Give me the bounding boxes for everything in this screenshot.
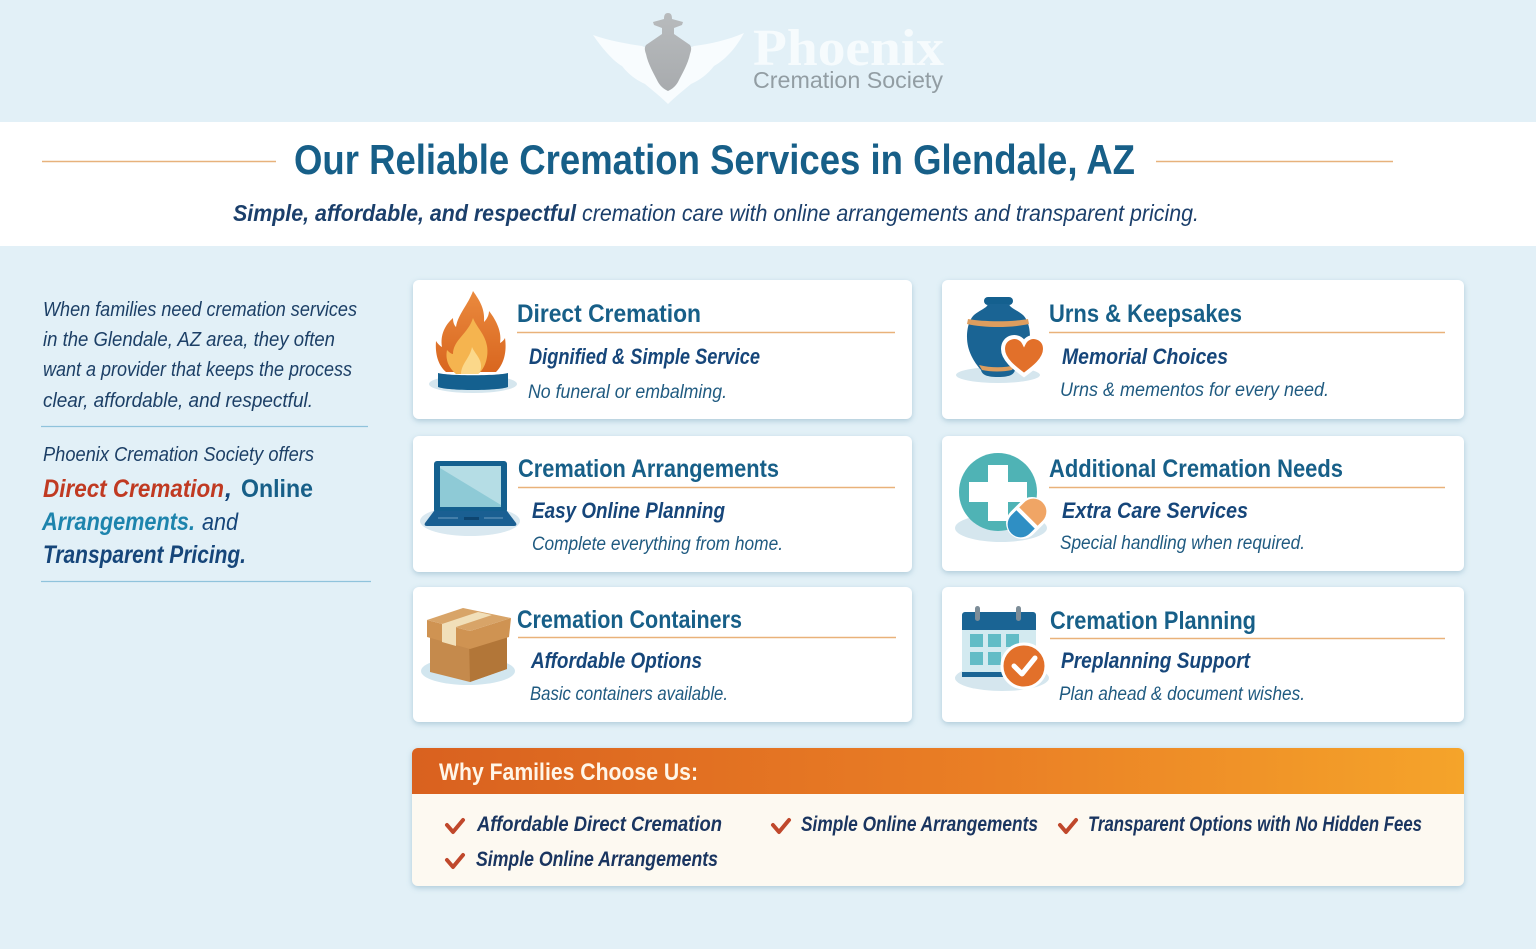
checklist item: Affordable Direct Cremation: [476, 813, 722, 836]
logo: [593, 13, 944, 104]
panel: cremation arrangements: [413, 436, 912, 572]
card heading: Urns & Keepsakes: [1049, 300, 1242, 328]
card subheading: Memorial Choices: [1062, 344, 1228, 369]
icon: winged urn: [593, 13, 744, 104]
panel: intro text: Online: [241, 475, 313, 503]
card description: Plan ahead & document wishes.: [1059, 684, 1305, 705]
title: Our Reliable Cremation Services in Glendale, AZ: [294, 136, 1135, 183]
icon: laptop: [420, 461, 520, 536]
panel: additional cremation needs: [942, 436, 1464, 571]
card heading: Additional Cremation Needs: [1049, 455, 1343, 483]
card heading: Cremation Arrangements: [518, 455, 779, 483]
panel: intro text: When families need cremation services: [43, 298, 357, 321]
card description: Special handling when required.: [1060, 533, 1305, 554]
icon: medical cross with capsule: [955, 453, 1055, 546]
card description: Complete everything from home.: [532, 534, 783, 555]
checklist item: Simple Online Arrangements: [476, 848, 718, 871]
checklist item: Simple Online Arrangements: [801, 813, 1038, 836]
panel: intro text: clear, affordable, and respectful.: [43, 389, 313, 412]
subtitle: Simple, affordable, and respectful cremation care with online arrangements and transparent pricing.: [233, 200, 1199, 226]
checklist item: Transparent Options with No Hidden Fees: [1088, 813, 1422, 836]
logo: Cremation Society: [753, 67, 943, 93]
panel: intro text: and: [202, 509, 239, 536]
card description: No funeral or embalming.: [528, 382, 727, 403]
card heading: Cremation Planning: [1050, 607, 1256, 635]
banner: [412, 748, 1464, 794]
card subheading: Extra Care Services: [1062, 498, 1248, 523]
icon: urn with heart: [956, 297, 1045, 383]
panel: intro text: want a provider that keeps the process: [43, 358, 352, 381]
panel: urns and keepsakes: [942, 280, 1464, 419]
card heading: Direct Cremation: [517, 300, 701, 328]
panel: why families choose us: [412, 748, 1464, 886]
panel: intro text: Direct Cremation: [43, 475, 224, 503]
panel: intro text: Transparent Pricing.: [43, 541, 246, 569]
card heading: Cremation Containers: [517, 606, 742, 634]
icon: flame: [429, 291, 517, 393]
panel: intro text: ,: [224, 475, 232, 503]
panel: intro text: Arrangements.: [41, 508, 195, 536]
card description: Basic containers available.: [530, 684, 728, 705]
panel: intro text: [41, 298, 371, 582]
icon: calendar with check: [955, 606, 1049, 691]
logo wordmark: Phoenix: [753, 20, 944, 77]
panel: intro text: in the Glendale, AZ area, they often: [43, 328, 335, 351]
panel: intro text: Phoenix Cremation Society offers: [43, 443, 314, 466]
panel: cremation planning: [942, 587, 1464, 722]
title band: [0, 122, 1536, 246]
icon: cardboard box: [421, 608, 515, 685]
card subheading: Preplanning Support: [1061, 648, 1251, 673]
card subheading: Dignified & Simple Service: [529, 344, 760, 369]
panel: cremation containers: [413, 587, 912, 722]
card subheading: Easy Online Planning: [532, 498, 725, 523]
card description: Urns & mementos for every need.: [1060, 380, 1329, 401]
card subheading: Affordable Options: [530, 648, 702, 673]
panel: direct cremation: [413, 280, 912, 419]
banner heading: Why Families Choose Us:: [439, 759, 698, 786]
